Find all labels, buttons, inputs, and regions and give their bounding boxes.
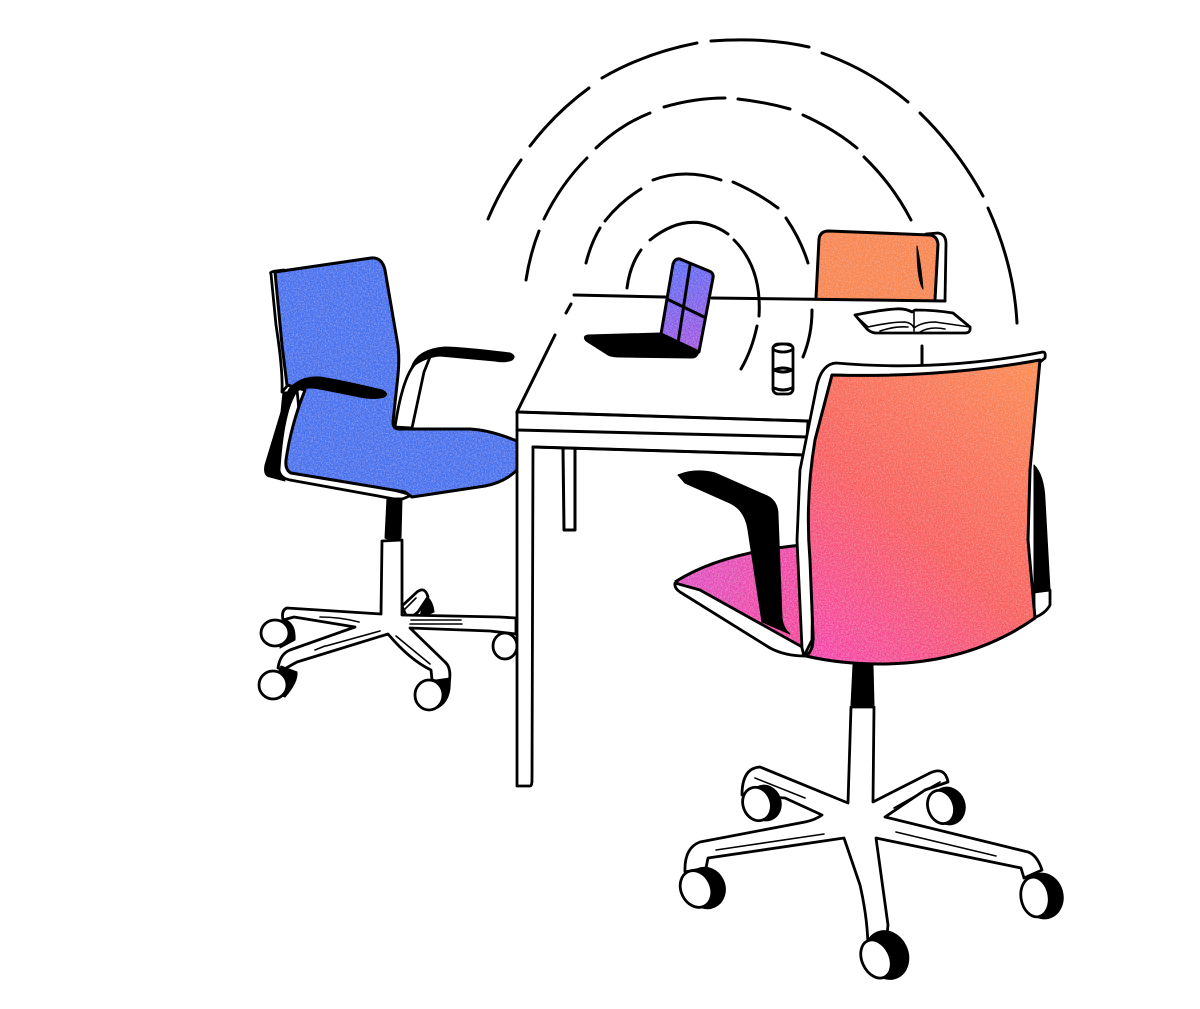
blue chair front arm — [282, 377, 387, 402]
laptop base — [584, 333, 699, 358]
front chair back upholstery — [806, 360, 1040, 664]
front chair base — [674, 707, 1068, 987]
chair: front chair with gradient — [674, 352, 1068, 987]
book — [855, 309, 970, 333]
blue chair casters — [280, 619, 295, 648]
chair: blue chair — [259, 258, 517, 710]
blue chair back arm — [395, 357, 430, 428]
front chair white frame — [797, 352, 1045, 656]
laptop screen — [661, 259, 713, 352]
front chair black side — [1034, 465, 1050, 592]
wireless signal arcs — [488, 40, 1017, 369]
front chair seat — [675, 545, 808, 656]
blue chair base — [259, 540, 517, 710]
front chair stem — [851, 665, 874, 708]
blue chair white frame — [271, 270, 288, 392]
glass — [773, 344, 793, 394]
table top surface — [517, 295, 1000, 420]
laptop — [584, 259, 713, 358]
blue chair upholstery — [275, 258, 517, 497]
front chair casters — [744, 781, 786, 825]
front chair arm — [678, 471, 790, 634]
table front — [517, 412, 808, 786]
table leg stub behind front chair — [920, 346, 924, 366]
blue chair black side — [265, 392, 297, 481]
chair: orange chair behind table — [816, 231, 946, 301]
table legs — [517, 412, 808, 786]
blue chair stem — [385, 498, 402, 540]
